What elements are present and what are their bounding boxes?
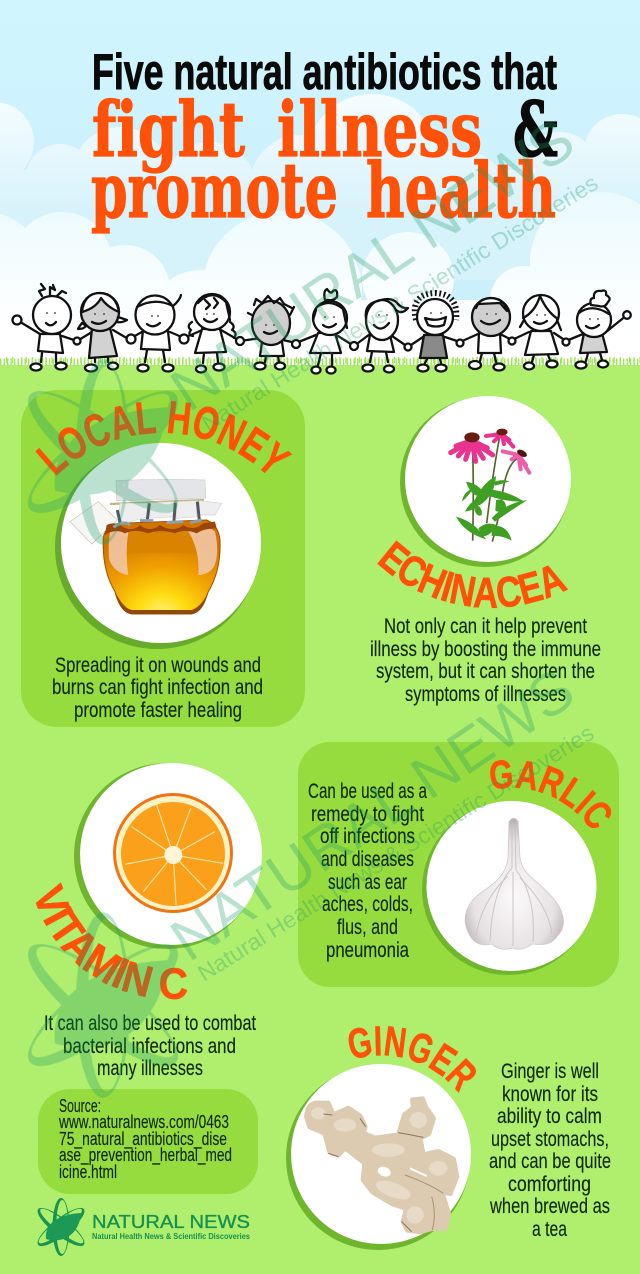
row of children holding hands	[12, 284, 631, 374]
text: garlic description: Can be used as a	[308, 780, 427, 803]
logo name: NATURAL NEWS	[92, 1211, 250, 1232]
text: ginger description: comforting	[508, 1173, 591, 1196]
text: ginger description: and can be quite	[489, 1150, 611, 1173]
text: garlic description	[308, 780, 427, 962]
circle shadow	[286, 1066, 470, 1250]
watermark 2	[13, 655, 598, 1098]
child 1	[12, 284, 77, 370]
icon: garlic bulb	[465, 818, 563, 949]
watermark 1 name: NATURAL NEWS	[159, 105, 586, 424]
white circle	[405, 396, 571, 562]
circle shadow	[74, 763, 260, 949]
icon: echinacea flower	[451, 429, 529, 542]
source text: Source:	[59, 1096, 101, 1116]
heading: ginger: GINGER	[348, 1026, 476, 1093]
child 6	[292, 289, 354, 374]
white circle	[80, 763, 262, 945]
watermark 1 logo	[13, 359, 193, 545]
white circle	[291, 1064, 471, 1244]
heading: vitamin c: VITAMIN C	[36, 882, 188, 1000]
title ampersand: &	[513, 85, 558, 174]
text: honey description	[52, 654, 263, 722]
heading: garlic: GARLIC	[490, 760, 612, 828]
text: ginger description: upset stomachs,	[491, 1128, 609, 1151]
title word: health: health	[366, 146, 556, 235]
text: garlic description: such as ear	[328, 871, 407, 894]
panel: vitamin c	[36, 763, 262, 1080]
source text	[58, 1096, 232, 1182]
panel: echinacea	[370, 396, 601, 706]
text: vitamin c description: bacterial infections and	[63, 1035, 236, 1058]
title	[91, 44, 558, 235]
white circle	[426, 801, 596, 971]
text: echinacea description: Not only can it help prevent	[384, 615, 587, 638]
panel: local honey	[21, 390, 305, 727]
child 4	[180, 294, 240, 372]
text: ginger description: ability to calm	[497, 1105, 602, 1128]
watermark 1	[13, 105, 602, 545]
watermark 1 tagline: Natural Health News & Scientific Discoveries	[197, 169, 602, 436]
circle shadow	[400, 397, 570, 567]
heading: local honey: LOCAL HONEY	[35, 400, 292, 476]
source background	[38, 1089, 258, 1194]
background: green field	[0, 365, 640, 1274]
source text: icine.html	[59, 1162, 117, 1182]
child 9	[456, 298, 512, 370]
panel: ginger	[286, 1026, 611, 1250]
text: echinacea description: symptoms of illnesses	[405, 683, 566, 706]
icon: orange slice	[113, 793, 233, 913]
grass strip	[0, 360, 640, 362]
text: honey description: Spreading it on wounds and	[55, 654, 261, 677]
logo icon	[33, 1198, 89, 1256]
text: garlic description: flus, and	[337, 916, 398, 939]
child 3	[126, 295, 184, 372]
child 5	[236, 296, 296, 370]
source text: www.naturalnews.com/0463	[58, 1112, 229, 1132]
child 7	[350, 299, 408, 372]
clouds	[0, 94, 640, 371]
source text: ase_prevention_herbal_med	[59, 1145, 232, 1166]
watermark 2 name: NATURAL NEWS	[159, 655, 586, 974]
text: ginger description: known for its	[502, 1083, 598, 1106]
circle shadow	[55, 445, 259, 649]
panel: garlic	[298, 742, 619, 987]
text: ginger description: a tea	[532, 1218, 567, 1241]
text: garlic description: remedy to fight	[311, 803, 424, 826]
watermark 2 tagline: Natural Health News & Scientific Discoveries	[193, 719, 598, 986]
circle shadow	[422, 803, 594, 975]
text: garlic description: pneumonia	[326, 939, 409, 962]
child 11	[562, 290, 631, 368]
panel background	[21, 390, 305, 727]
background: sky	[0, 0, 640, 370]
text: garlic description: off infections	[320, 825, 415, 848]
text: vitamin c description: It can also be used to combat	[44, 1012, 256, 1035]
child 2	[74, 293, 130, 372]
title word: promote: promote	[91, 146, 338, 235]
icon: ginger root	[306, 1099, 457, 1232]
text: ginger description	[489, 1060, 611, 1241]
source text: 75_natural_antibiotics_dise	[59, 1129, 227, 1150]
watermark 2 logo	[13, 912, 193, 1098]
title word: illness: illness	[277, 85, 482, 174]
title word: fight: fight	[92, 85, 245, 174]
text: vitamin c description: many illnesses	[97, 1057, 203, 1080]
text: vitamin c description	[44, 1012, 256, 1080]
text: ginger description: when brewed as	[489, 1195, 610, 1218]
icon: honey jar	[70, 479, 222, 614]
child 10	[508, 295, 566, 370]
panel: source	[38, 1089, 258, 1194]
text: echinacea description	[370, 615, 601, 706]
text: garlic description: aches, colds,	[322, 893, 413, 916]
text: ginger description: Ginger is well	[501, 1060, 599, 1083]
natural news logo	[33, 1198, 250, 1256]
text: garlic description: and diseases	[321, 848, 414, 871]
panel background	[298, 742, 619, 987]
white circle	[61, 443, 261, 643]
child 8	[404, 293, 460, 372]
logo tagline: Natural Health News & Scientific Discoveries	[92, 1231, 250, 1241]
text: honey description: promote faster healing	[74, 699, 242, 722]
text: honey description: burns can fight infection and	[52, 676, 263, 699]
heading: echinacea: ECHINACEA	[377, 540, 568, 608]
